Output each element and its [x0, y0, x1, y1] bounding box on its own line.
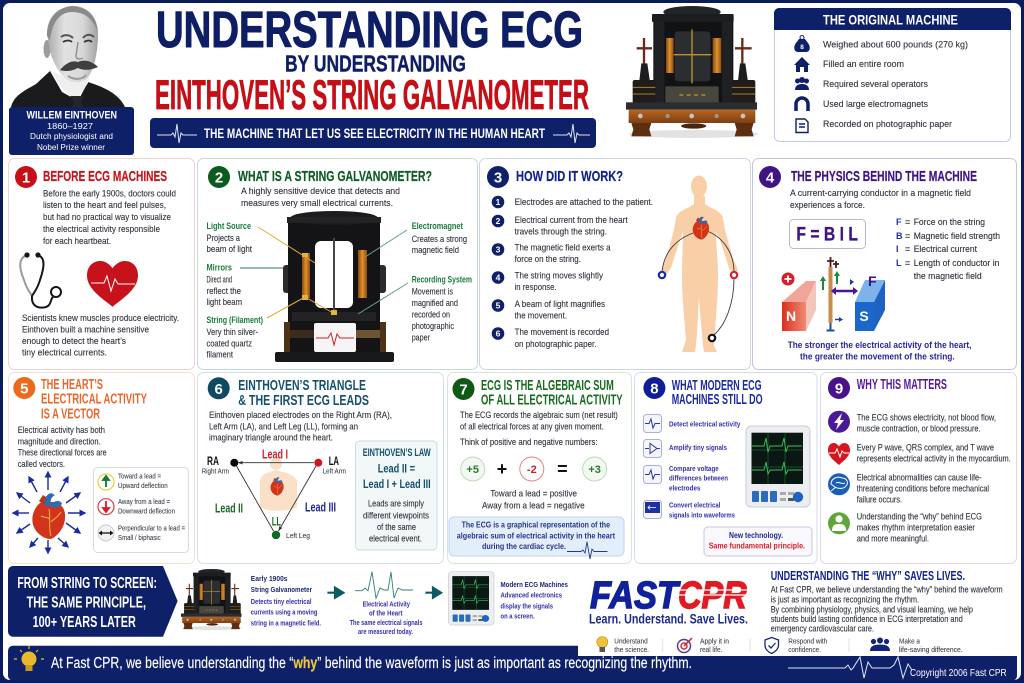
string to screen arrow heading: THE SAME PRINCIPLE, [27, 594, 146, 612]
panel: Fast CPR brand: Learn. Understand. Save Lives. [589, 612, 748, 626]
panel 7: algebraic sum: OF ALL ELECTRICAL ACTIVITY [481, 392, 623, 408]
panel 7: algebraic sum: Think of positive and negative numbers: [460, 437, 598, 447]
panel: Fast CPR brand: real life. [700, 647, 722, 654]
capability list: signals into waveforms [669, 510, 735, 519]
formula: F = B I L [796, 225, 858, 246]
galvanometer illustration [275, 211, 394, 362]
panel 5: the heart's electrical activity: IS A VECTOR [41, 406, 100, 422]
panel: the original machine: THE ORIGINAL MACHINE [823, 12, 958, 28]
name plate: Nobel Prize winner [37, 143, 105, 152]
steps [492, 196, 653, 349]
electrical activity text: of the Heart [369, 608, 403, 618]
early 1900s text: Detects tiny electrical [251, 597, 312, 606]
body with electrodes [659, 176, 738, 352]
triangle diagram [202, 448, 346, 540]
Einthoven's law box: Lead I + Lead III [363, 477, 431, 491]
equation: + [497, 459, 507, 479]
triangle diagram: RA [207, 454, 219, 468]
panel 9: why this matters: The ECG shows electricity, not blood flow, [857, 413, 996, 423]
panel 2: what is a string galvanometer: 2 [215, 170, 223, 186]
panel 8: what modern ECG machines still do: WHAT MODERN ECG [672, 378, 762, 394]
panel 7: algebraic sum: Away from a lead = negative [482, 500, 585, 510]
steps: 4 [496, 272, 501, 282]
name plate: WILLEM EINTHOVEN [26, 110, 117, 122]
bottom banner: Copyright 2006 Fast CPR [910, 668, 1007, 679]
text block: scientists: tiny electrical currents. [22, 348, 107, 358]
magnets and string diagram [782, 257, 885, 331]
name plate: 1860–1927 [47, 122, 94, 131]
steps: 5 [496, 300, 501, 310]
title [155, 1, 589, 118]
icon: people [870, 638, 890, 651]
icon: electromagnet [796, 98, 808, 111]
mission text: emergency cardiovascular care. [771, 624, 874, 634]
panel: the original machine: Recorded on photographic paper [823, 119, 952, 129]
panel: the original machine: Filled an entire room [823, 59, 904, 69]
steps: The magnetic field exerts a [515, 242, 611, 252]
leader lines [240, 227, 408, 318]
labels right: photographic [412, 321, 454, 331]
icon: bolt [828, 411, 850, 433]
logo: CPR [678, 575, 747, 617]
panel: the original machine [774, 8, 1011, 142]
magnets and string diagram: F [868, 273, 877, 289]
steps: The string moves slightly [515, 270, 603, 280]
subtitle banner: THE MACHINE THAT LET US SEE ELECTRICITY IN THE HUMAN HEART [204, 125, 545, 141]
early 1900s text: currents using a moving [251, 608, 318, 616]
text block: scientists: Einthoven built a machine sensitive [22, 324, 149, 334]
equation [461, 457, 607, 481]
magnets and string diagram: S [859, 308, 869, 324]
labels left: Direct and [206, 274, 232, 284]
equation: +3 [588, 464, 601, 476]
text block: intro: listen to the heart and feel pulses, [43, 200, 166, 210]
deflection legend: Toward a lead = [118, 474, 161, 480]
icon: stethoscope [20, 253, 61, 308]
panel 4: the physics behind the machine: The stronger the electrical activity of the heart, [788, 340, 972, 350]
panel 5: the heart's electrical activity: THE HEART’S [41, 377, 103, 393]
early 1900s text [251, 574, 321, 628]
panel 3: how did it work: HOW DID IT WORK? [516, 168, 623, 185]
labels left: coated quartz [206, 338, 252, 348]
labels left [206, 221, 263, 360]
steps: A beam of light magnifies [515, 299, 605, 309]
icon: heart with pulse [87, 261, 138, 307]
mission text [771, 584, 1003, 634]
formula legend: = [905, 231, 910, 241]
labels right [412, 221, 472, 342]
panel: Fast CPR brand: the science. [614, 647, 649, 654]
formula legend: Force on the string [914, 217, 985, 227]
panel 8: what modern ECG machines still do: MACHINES STILL DO [672, 392, 763, 408]
panel 7: algebraic sum: of all electrical forces at any given moment. [460, 421, 604, 431]
labels left: beam of light [206, 244, 252, 254]
panel 6: Einthoven's triangle: 6 [215, 381, 223, 398]
panel: the original machine: Used large electromagnets [823, 99, 928, 109]
panel 9: why this matters: 9 [835, 380, 843, 398]
Einthoven's law box: Lead II = [378, 462, 415, 476]
deflection legend: Small / biphasic [118, 535, 161, 542]
panel: Fast CPR brand: Make a [899, 638, 920, 646]
steps: The movement is recorded [515, 327, 609, 337]
formula legend: the magnetic field [914, 271, 982, 281]
equation: -2 [527, 464, 537, 476]
capability list: Detect electrical activity [669, 420, 741, 428]
panel 9: why this matters: failure occurs. [857, 494, 902, 504]
mission text: students build lasting confidence in ECG interpretation and [771, 614, 963, 624]
steps: Electrical current from the heart [515, 215, 628, 225]
panel 4: the physics behind the machine: A current-carrying conductor in a magnetic field [790, 188, 971, 198]
ECG wave [355, 572, 413, 598]
labels right: paper [412, 332, 430, 342]
panel 5: the heart's electrical activity: Electrical activity has both [18, 425, 105, 435]
panel 3: how did it work: 3 [494, 170, 502, 186]
modern ECG text: on a screen. [500, 612, 535, 621]
panel 5: the heart's electrical activity [8, 372, 194, 564]
capability list: Compare voltage [669, 464, 719, 473]
Einthoven's law box: electrical event. [369, 534, 422, 544]
panel: Fast CPR brand: Respond with [788, 638, 827, 646]
portrait: Willem Einthoven [11, 6, 125, 107]
heart with vector arrows [13, 472, 85, 553]
triangle diagram: Left Arm [323, 468, 346, 476]
steps: in response. [515, 282, 557, 292]
labels right: magnified and [412, 298, 458, 308]
small machine [181, 569, 242, 630]
panel 2: what is a string galvanometer: measures very small electrical currents. [241, 198, 393, 208]
callout: during the cardiac cycle. [482, 541, 566, 551]
icon: operators [795, 77, 809, 90]
panel 7: algebraic sum: Toward a lead = positive [490, 489, 577, 499]
Einthoven's law box: Leads are simply [368, 498, 424, 508]
early 1900s text: string in a magnetic field. [251, 618, 321, 628]
title: EINTHOVEN’S STRING GALVANOMETER [155, 71, 589, 118]
electrical activity text: The same electrical signals [350, 618, 422, 627]
bottom banner [8, 646, 1017, 681]
electrical activity text: Electrical Activity [363, 600, 411, 608]
panel 1: before ECG machines: BEFORE ECG MACHINES [43, 168, 167, 185]
panel 1: before ECG machines [8, 158, 194, 370]
name plate: Dutch physiologist and [30, 132, 113, 141]
steps: 2 [496, 216, 501, 226]
text block: scientists: enough to detect the heart’s [22, 336, 126, 346]
icon: heart [828, 443, 850, 465]
panel: Fast CPR brand: Apply it in [700, 638, 729, 646]
early 1900s text: Early 1900s [251, 574, 288, 583]
panel 7: algebraic sum: ECG IS THE ALGEBRAIC SUM [481, 377, 614, 394]
panel: Fast CPR brand: Understand [614, 638, 648, 646]
logo [590, 575, 750, 617]
icon: weight [794, 36, 810, 52]
panel 3: how did it work [480, 158, 750, 370]
panel 2: what is a string galvanometer [198, 158, 478, 370]
arrow [425, 588, 441, 598]
panel: Fast CPR brand [578, 565, 1017, 656]
steps: travels through the string. [515, 226, 607, 236]
panel 6: Einthoven's triangle: imaginary triangle around the heart. [209, 433, 333, 443]
callout: New technology. [729, 530, 783, 540]
panel 9: why this matters: WHY THIS MATTERS [857, 377, 947, 393]
callout [449, 517, 624, 559]
panel 9: why this matters [820, 372, 1016, 564]
mission text: is just as important as recognizing the rhythm. [771, 594, 919, 604]
formula legend: = [905, 217, 910, 227]
steps: force on the string. [515, 254, 581, 264]
panel 5: the heart's electrical activity: These directional forces are [18, 448, 107, 458]
triangle diagram: LL [272, 514, 281, 528]
labels right: recorded on [412, 310, 450, 320]
panel 7: algebraic sum [448, 372, 632, 564]
formula legend: F [896, 217, 902, 227]
callout: Same fundamental principle. [709, 541, 805, 551]
modern ECG text: Modern ECG Machines [500, 580, 568, 589]
Einthoven's law box: of the same [377, 522, 416, 532]
panel: Fast CPR brand: life-saving difference. [899, 647, 963, 654]
magnets and string diagram: N [786, 308, 796, 324]
deflection legend: Away from a lead = [118, 499, 170, 506]
formula legend: = [905, 258, 910, 268]
labels left: Mirrors [206, 262, 232, 272]
triangle diagram: LA [329, 454, 339, 468]
labels left: Very thin silver- [206, 327, 258, 337]
text block: scientists [22, 313, 179, 358]
text block: intro: but had no practical way to visualize [43, 212, 171, 222]
panel 7: algebraic sum: The ECG records the algebraic sum (net result) [460, 410, 618, 420]
panel 8: what modern ECG machines still do: 8 [650, 380, 659, 398]
Einthoven's law box: EINTHOVEN’S LAW [363, 447, 431, 459]
callout: The ECG is a graphical representation of the [462, 519, 610, 529]
triangle diagram: Lead I [262, 448, 288, 462]
panel 6: Einthoven's triangle: EINTHOVEN’S TRIANGLE [238, 377, 366, 394]
steps: the movement. [515, 310, 567, 320]
formula [790, 220, 866, 248]
callout: algebraic sum of electrical activity in the heart [457, 530, 615, 540]
icon: light bulb [14, 646, 44, 671]
steps: 3 [496, 244, 501, 254]
labels left: Projects a [206, 233, 240, 243]
string to screen arrow heading: FROM STRING TO SCREEN: [17, 575, 157, 592]
deflection legend: Upward deflection [118, 483, 168, 490]
formula legend: Length of conductor in [914, 258, 1000, 268]
text block: intro: for each heartbeat. [43, 236, 111, 246]
modern ECG text [500, 580, 568, 621]
panel: the original machine: Required several operators [823, 79, 928, 89]
panel 9: why this matters: Understanding the “why” behind ECG [857, 511, 982, 521]
formula legend: = [905, 244, 910, 254]
labels left: filament [206, 350, 233, 360]
string to screen arrow heading: 100+ YEARS LATER [33, 614, 136, 631]
panel 9: why this matters: muscle contraction, or blood pressure. [857, 424, 980, 434]
name plate [9, 107, 134, 155]
triangle diagram: Left Leg [286, 533, 310, 540]
labels right: Recording System [412, 274, 472, 284]
panel 2: what is a string galvanometer: WHAT IS A STRING GALVANOMETER? [238, 168, 432, 185]
steps: on photographic paper. [515, 339, 596, 349]
steps: Electrodes are attached to the patient. [515, 197, 653, 207]
title: UNDERSTANDING ECG [156, 1, 583, 58]
steps: 6 [496, 328, 501, 338]
labels right: Movement is [412, 286, 453, 296]
formula legend: Magnetic field strength [914, 231, 1000, 241]
panel 8: what modern ECG machines still do [634, 372, 817, 564]
callout [704, 527, 812, 556]
deflection legend [94, 468, 188, 552]
icon: shield [765, 638, 778, 654]
panel: Fast CPR brand: confidence. [788, 647, 821, 654]
modern ECG text: display the signals [500, 601, 553, 610]
triangle diagram: Right Arm [202, 468, 229, 476]
icon: document [796, 119, 808, 132]
capability list: differences between [669, 474, 728, 483]
title: BY UNDERSTANDING [285, 50, 466, 76]
labels right: Creates a strong [412, 234, 467, 244]
labels left: light beam [206, 297, 242, 307]
panel: the original machine: Weighed about 600 pounds (270 kg) [823, 40, 968, 50]
icon: bulb [597, 636, 608, 652]
panel 9: why this matters: Every P wave, QRS complex, and T wave [857, 443, 994, 453]
formula legend: I [896, 244, 899, 254]
icon: person [828, 512, 850, 534]
panel 5: the heart's electrical activity: 5 [20, 380, 28, 398]
small monitor [448, 572, 494, 625]
electrical activity text [350, 600, 422, 636]
panel 4: the physics behind the machine [752, 158, 1016, 370]
panel 9: why this matters: threatening conditions before mechanical [857, 483, 989, 493]
panel 9: why this matters: makes rhythm interpretation easier [857, 522, 975, 532]
icon: house [794, 57, 810, 72]
icon: brain [828, 473, 850, 495]
text block: intro: Before the early 1900s, doctors could [43, 188, 176, 198]
text block: scientists: Scientists knew muscles produce electricity. [22, 313, 179, 323]
capability list: Convert electrical [669, 500, 720, 509]
panel 9: why this matters: Electrical abnormalities can cause life- [857, 472, 982, 482]
equation: +5 [466, 464, 479, 476]
bottom banner: At Fast CPR, we believe understanding the “why” behind the waveform is just as important as recognizing the rhythm. [51, 655, 692, 672]
panel 4: the physics behind the machine: 4 [766, 170, 775, 186]
modern monitor [746, 426, 810, 507]
icon: target [678, 638, 692, 652]
panel 2: what is a string galvanometer: A highly sensitive device that detects and [241, 186, 400, 196]
labels right: magnetic field [412, 245, 459, 255]
icon: weight: 8 [800, 44, 804, 51]
text block: intro: the electrical activity responsible [43, 224, 160, 234]
deflection legend: Perpendicular to a lead = [118, 526, 185, 532]
labels left: reflect the [206, 286, 241, 296]
capability list [644, 414, 741, 519]
panel 4: the physics behind the machine: the greater the movement of the string. [800, 352, 955, 362]
labels left: String (Filament) [206, 315, 263, 325]
panel 6: Einthoven's triangle: Einthoven placed electrodes on the Right Arm (RA), [209, 410, 392, 420]
formula legend [896, 217, 1000, 281]
subtitle banner [150, 118, 596, 148]
modern ECG text: Advanced electronics [500, 591, 562, 600]
arrow [327, 588, 343, 598]
electrical activity text: are measured today. [358, 627, 413, 636]
panel 9: why this matters: and more meaningful. [857, 533, 929, 543]
panel 6: Einthoven's triangle: Left Arm (LA), and Left Leg (LL), forming an [209, 421, 358, 431]
early 1900s text: String Galvanometer [251, 585, 312, 594]
formula legend: Electrical current [914, 244, 977, 254]
formula legend: L [896, 258, 902, 268]
panel 1: before ECG machines: 1 [22, 170, 30, 186]
steps: 1 [496, 197, 501, 207]
triangle diagram: Lead III [305, 500, 336, 514]
logo: FAST [590, 575, 681, 617]
formula legend: B [896, 231, 903, 241]
Einthoven's law box: different viewpoints [363, 510, 429, 520]
text block: intro [43, 188, 176, 246]
capability list: electrodes [669, 484, 700, 493]
Einthoven's law box [356, 441, 437, 550]
panel 5: the heart's electrical activity: called vectors. [18, 459, 65, 469]
panel 5: the heart's electrical activity: ELECTRICAL ACTIVITY [41, 392, 147, 408]
panel 6: Einthoven's triangle [198, 372, 444, 564]
panel 5: the heart's electrical activity: magnitude and direction. [18, 436, 101, 446]
string to screen arrow heading [8, 566, 178, 637]
deflection legend: Downward deflection [118, 508, 175, 515]
mission text: By combining physiology, physics, and visual learning, we help [771, 604, 973, 614]
labels left: Light Source [206, 221, 251, 231]
labels right: Electromagnet [412, 221, 463, 231]
capability list: Amplify tiny signals [669, 443, 727, 452]
panel 4: the physics behind the machine: experiences a force. [790, 200, 865, 210]
panel 6: Einthoven's triangle: & THE FIRST ECG LEADS [238, 392, 369, 409]
triangle diagram: Lead II [215, 502, 243, 516]
machine illustration [626, 6, 758, 138]
panel 7: algebraic sum: 7 [459, 382, 468, 398]
equation: = [557, 459, 568, 479]
